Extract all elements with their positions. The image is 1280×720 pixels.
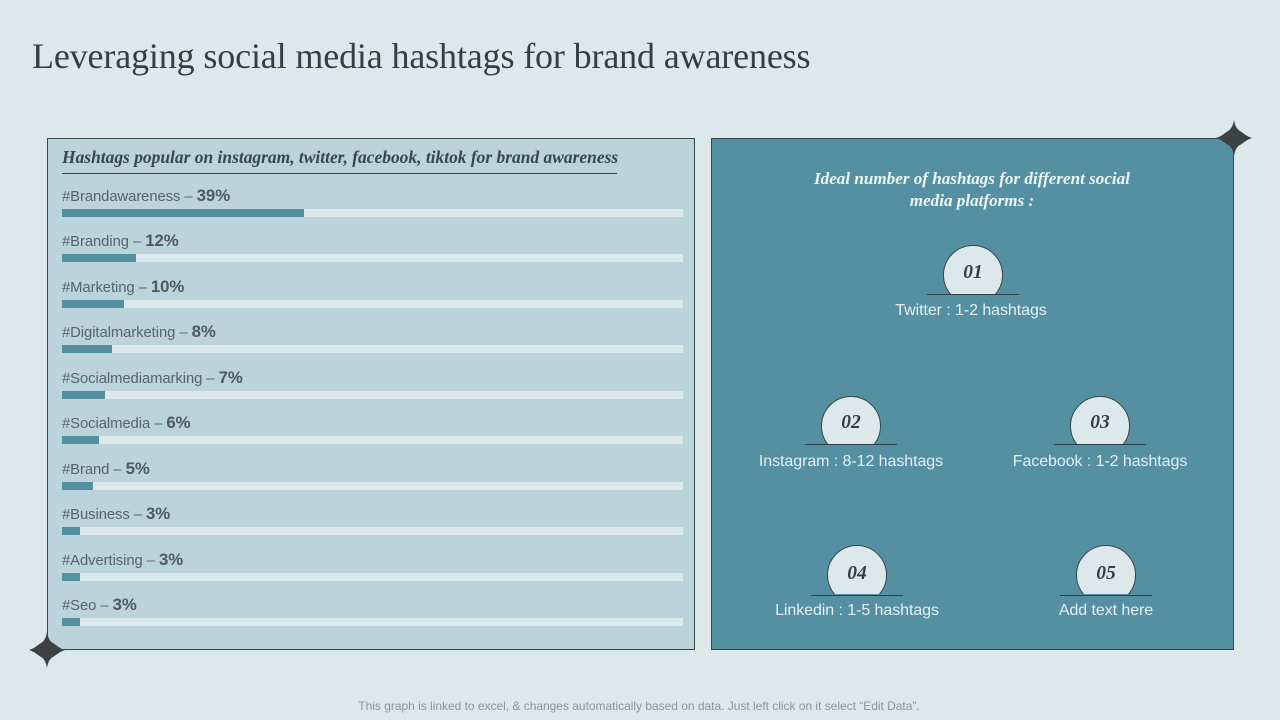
item 02: Instagram: Instagram : 8-12 hashtags — [759, 453, 943, 470]
bar: Digitalmarketing: #Digitalmarketing – 8% — [62, 322, 216, 341]
bar: Brand — [62, 459, 683, 490]
bar: Business: #Business – 3% — [62, 504, 170, 523]
item 04: Linkedin — [775, 545, 939, 619]
title: Leveraging social media hashtags for brand awareness — [32, 36, 810, 76]
heading: ideal number of hashtags: Ideal number of hashtags for different social — [814, 168, 1130, 188]
item 01: Twitter: Twitter : 1-2 hashtags — [895, 302, 1047, 319]
icon: sparkle bottom left — [29, 632, 65, 668]
bar: Branding — [62, 231, 683, 262]
bar: Seo: #Seo – 3% — [62, 595, 137, 614]
bar: Advertising: #Advertising – 3% — [62, 550, 183, 569]
item 02: Instagram — [759, 396, 943, 470]
bar: Branding: #Branding – 12% — [62, 231, 179, 250]
item 05: Add text here: 05 — [1096, 563, 1116, 584]
item 05: Add text here: Add text here — [1059, 602, 1153, 619]
heading: popular hashtags: Hashtags popular on instagram, twitter, facebook, tiktok for brand awareness — [62, 147, 618, 167]
bar: Business — [62, 504, 683, 535]
bar: Socialmedia — [62, 413, 683, 444]
footnote: This graph is linked to excel, & changes automatically based on data. Just left click on it select “Edit Data”. — [358, 699, 920, 713]
bar: Marketing — [62, 277, 683, 308]
icon: sparkle top right — [1216, 120, 1252, 156]
bar: Marketing: #Marketing – 10% — [62, 277, 184, 296]
item 03: Facebook: 03 — [1090, 412, 1110, 433]
panel: ideal number of hashtags background — [711, 138, 1234, 650]
heading: ideal number of hashtags — [814, 168, 1130, 210]
bar: Brandawareness — [62, 186, 683, 217]
bar: Advertising — [62, 550, 683, 581]
item 04: Linkedin: Linkedin : 1-5 hashtags — [775, 602, 939, 619]
bar: Brand: #Brand – 5% — [62, 459, 150, 478]
bar: Seo — [62, 595, 683, 626]
item 03: Facebook — [1013, 396, 1187, 470]
bar: Digitalmarketing — [62, 322, 683, 353]
panel: popular hashtags background — [47, 138, 695, 650]
bar: Socialmediamarking — [62, 368, 683, 399]
heading: ideal number of hashtags: media platforms : — [910, 190, 1034, 210]
bar: Brandawareness: #Brandawareness – 39% — [62, 186, 230, 205]
item 05: Add text here — [1059, 545, 1153, 619]
item 01: Twitter — [895, 245, 1047, 319]
bar: Socialmediamarking: #Socialmediamarking – 7% — [62, 368, 243, 387]
item 04: Linkedin: 04 — [847, 563, 867, 584]
bar: Socialmedia: #Socialmedia – 6% — [62, 413, 191, 432]
item 02: Instagram: 02 — [841, 412, 861, 433]
item 03: Facebook: Facebook : 1-2 hashtags — [1013, 453, 1187, 470]
item 01: Twitter: 01 — [963, 262, 983, 283]
